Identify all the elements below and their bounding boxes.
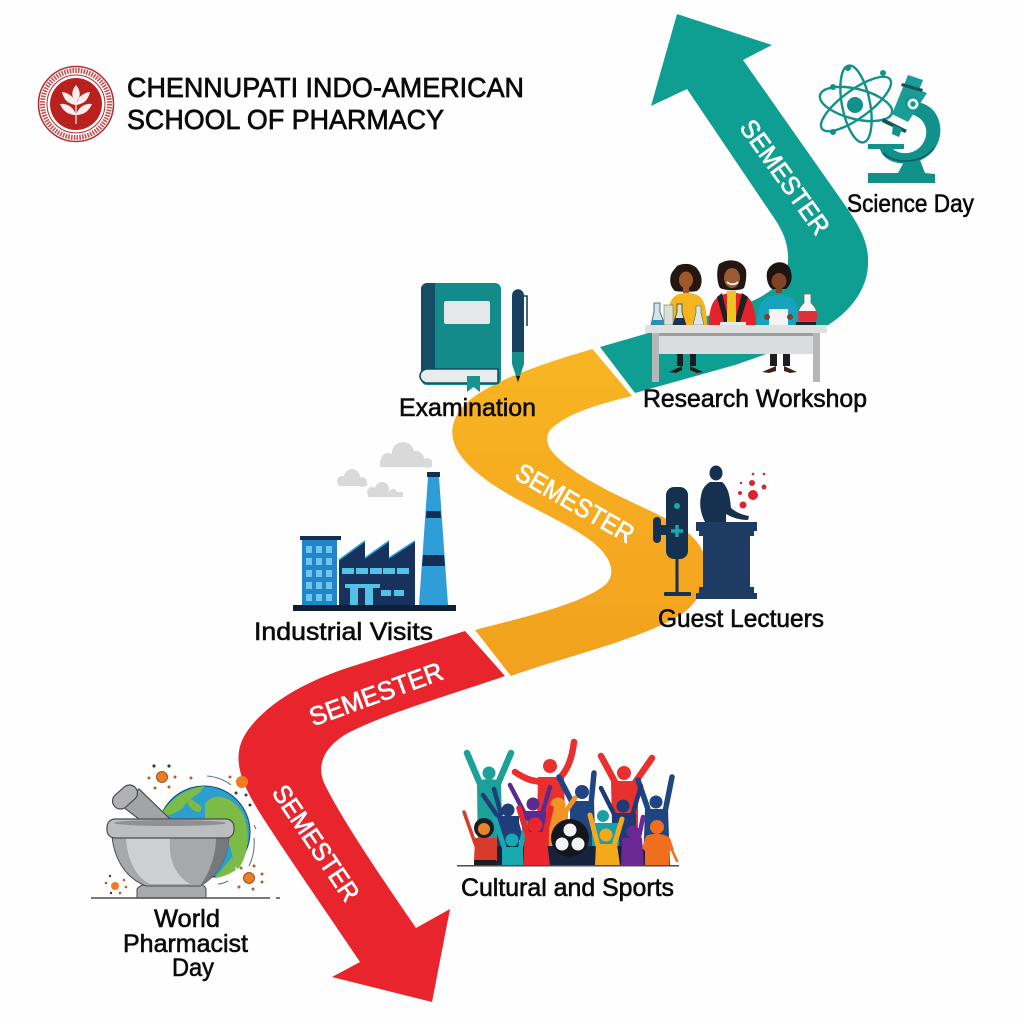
header logo: school seal <box>38 66 114 142</box>
arrow: red semester segment: SEMESTER <box>266 779 366 907</box>
label: Science Day: Science Day <box>847 190 974 218</box>
arrow: yellow semester segment: SEMESTER <box>510 457 640 549</box>
person: left researcher <box>667 264 707 373</box>
label: World Pharmacist Day: Pharmacist <box>123 930 248 958</box>
middle row figures <box>483 773 672 866</box>
globe <box>158 786 250 878</box>
arrow: yellow semester segment <box>452 349 706 676</box>
pestle <box>109 782 170 826</box>
table <box>645 325 827 382</box>
arrow: teal semester segment: SEMESTER <box>734 114 836 240</box>
flasks <box>651 294 817 325</box>
label: Examination: Examination <box>399 394 536 422</box>
chimney <box>419 477 448 605</box>
microphone <box>653 487 691 596</box>
orbit strokes <box>207 776 256 884</box>
icon: celebrating crowd with football <box>457 742 679 866</box>
icon: book and pen <box>420 283 527 392</box>
person: right researcher <box>757 262 799 373</box>
label: World Pharmacist Day <box>123 905 248 982</box>
orange particles <box>105 764 264 894</box>
front row figures <box>464 808 677 866</box>
ground line <box>91 897 280 899</box>
person: centre researcher <box>709 260 756 325</box>
label: Guest Lectuers: Guest Lectuers <box>658 605 824 633</box>
arrow: teal semester segment <box>600 14 868 393</box>
arrow: red semester segment: SEMESTER <box>305 656 447 732</box>
label: World Pharmacist Day: World <box>154 905 220 933</box>
arrow: red semester segment <box>239 631 505 1002</box>
label: World Pharmacist Day: Day <box>172 954 214 982</box>
label: Industrial Visits: Industrial Visits <box>254 618 433 646</box>
back row figures <box>467 742 652 866</box>
title: school name: SCHOOL OF PHARMACY <box>127 104 444 135</box>
label: Cultural and Sports: Cultural and Sports <box>461 874 674 902</box>
red dots <box>738 473 766 508</box>
icon: research workshop table with three people <box>645 260 827 382</box>
icon: atom and microscope <box>814 63 940 183</box>
mortar bowl <box>107 819 234 898</box>
clouds <box>337 442 432 497</box>
label: Research Workshop: Research Workshop <box>643 385 867 413</box>
speaker silhouette <box>700 466 749 522</box>
podium <box>696 522 757 599</box>
title: school name <box>127 72 524 135</box>
title: school name: CHENNUPATI INDO-AMERICAN <box>127 72 524 103</box>
football <box>551 819 589 857</box>
office block <box>302 540 337 605</box>
icon: factory with chimney and clouds <box>293 442 456 611</box>
icon: mortar, pestle and globe <box>91 764 280 898</box>
saw-tooth factory hall <box>339 541 415 605</box>
icon: guest lecturer with microphone and podium <box>653 466 766 599</box>
